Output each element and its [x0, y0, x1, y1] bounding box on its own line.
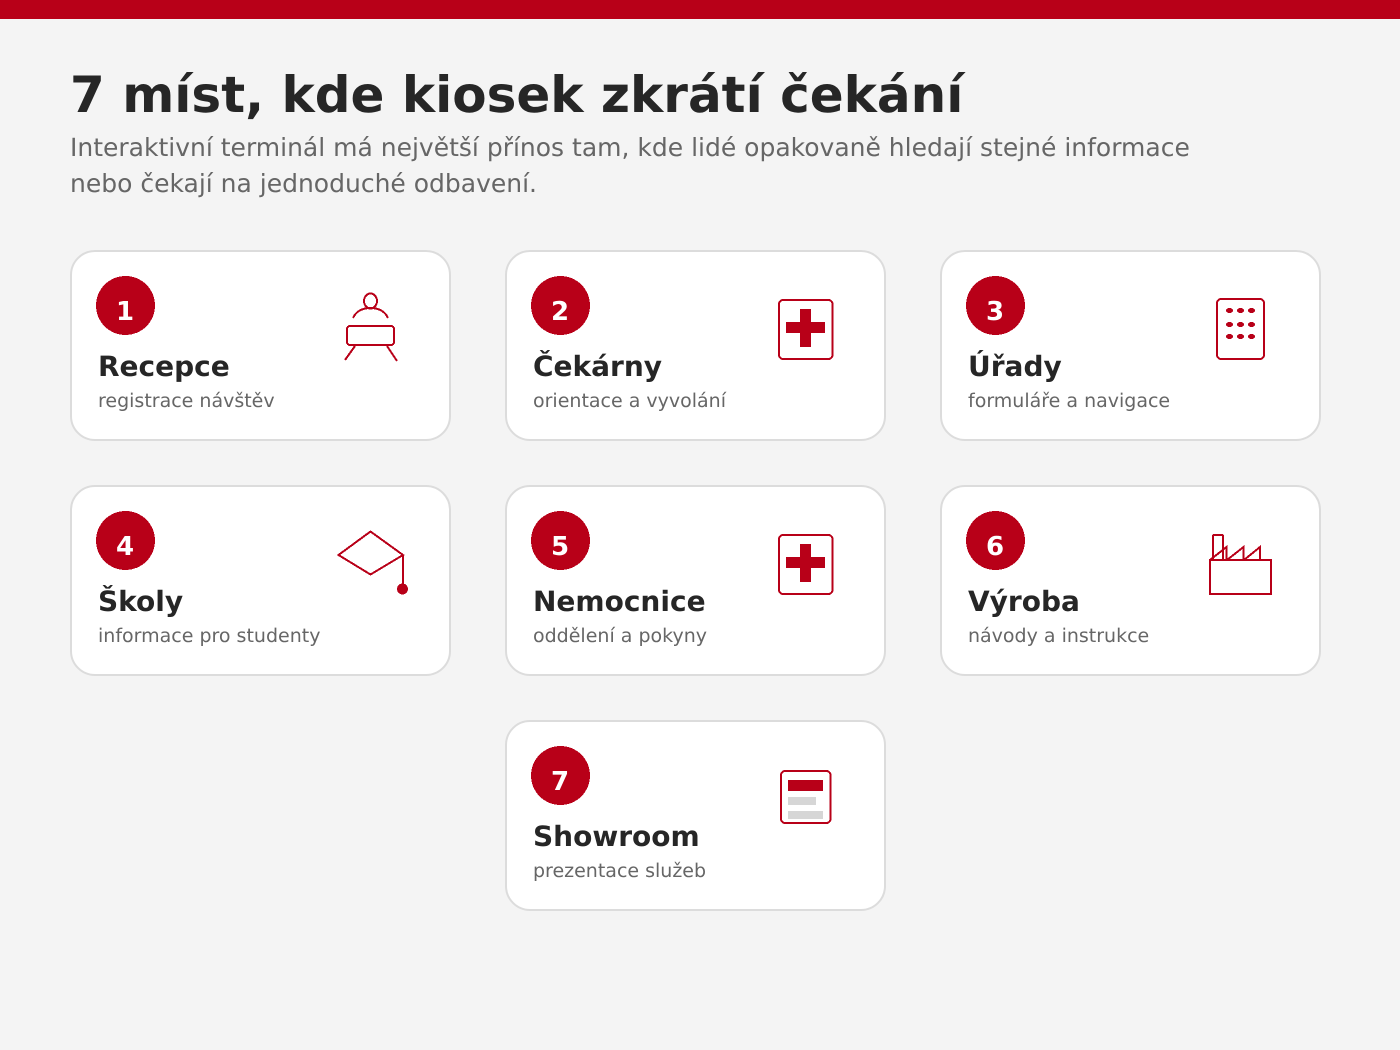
number badge 1	[96, 276, 155, 335]
number badge 3: 3	[986, 297, 1004, 327]
panel: Školy	[71, 486, 450, 675]
panel: Showroom	[506, 721, 885, 910]
panel: Nemocnice	[506, 486, 885, 675]
icon: medical cross	[779, 300, 832, 359]
number badge 7: 7	[551, 767, 569, 797]
top accent bar	[0, 0, 1400, 19]
number badge 6: 6	[986, 532, 1004, 562]
icon: graduation cap	[338, 532, 408, 594]
number badge 5	[531, 511, 590, 570]
heading: Úřady: Úřady	[968, 350, 1062, 383]
number badge 1: 1	[116, 297, 134, 327]
text: prezentace služeb: prezentace služeb	[533, 860, 706, 882]
number badge 4: 4	[116, 532, 134, 562]
icon: factory	[1210, 535, 1271, 594]
heading: Čekárny: Čekárny	[533, 350, 662, 383]
heading: Recepce: Recepce	[98, 350, 230, 383]
title: 7 míst, kde kiosek zkrátí čekání	[70, 66, 966, 124]
number badge 7	[531, 746, 590, 805]
number badge 6	[966, 511, 1025, 570]
heading: Nemocnice: Nemocnice	[533, 585, 706, 618]
text: orientace a vyvolání: orientace a vyvolání	[533, 390, 727, 412]
icon: reception desk	[345, 294, 397, 361]
heading: Showroom: Showroom	[533, 820, 700, 853]
panel: Recepce	[71, 251, 450, 440]
text: oddělení a pokyny: oddělení a pokyny	[533, 625, 707, 647]
subtitle: Interaktivní terminál má největší přínos tam, kde lidé opakovaně hledají stejné informace	[70, 133, 1190, 162]
panel: Čekárny	[506, 251, 885, 440]
text: informace pro studenty: informace pro studenty	[98, 625, 320, 647]
icon: form keypad	[1217, 299, 1264, 359]
panel: Úřady	[941, 251, 1320, 440]
number badge 3	[966, 276, 1025, 335]
text: formuláře a navigace: formuláře a navigace	[968, 390, 1170, 412]
text: návody a instrukce: návody a instrukce	[968, 625, 1149, 647]
subtitle	[70, 133, 1190, 198]
number badge 2	[531, 276, 590, 335]
icon: medical cross	[779, 535, 832, 594]
panel: Výroba	[941, 486, 1320, 675]
icon: display screen	[781, 771, 830, 823]
subtitle: nebo čekají na jednoduché odbavení.	[70, 169, 537, 198]
number badge 2: 2	[551, 297, 569, 327]
number badge 4	[96, 511, 155, 570]
heading: Školy: Školy	[98, 585, 183, 618]
text: registrace návštěv: registrace návštěv	[98, 390, 275, 412]
heading: Výroba: Výroba	[968, 585, 1080, 618]
number badge 5: 5	[551, 532, 569, 562]
